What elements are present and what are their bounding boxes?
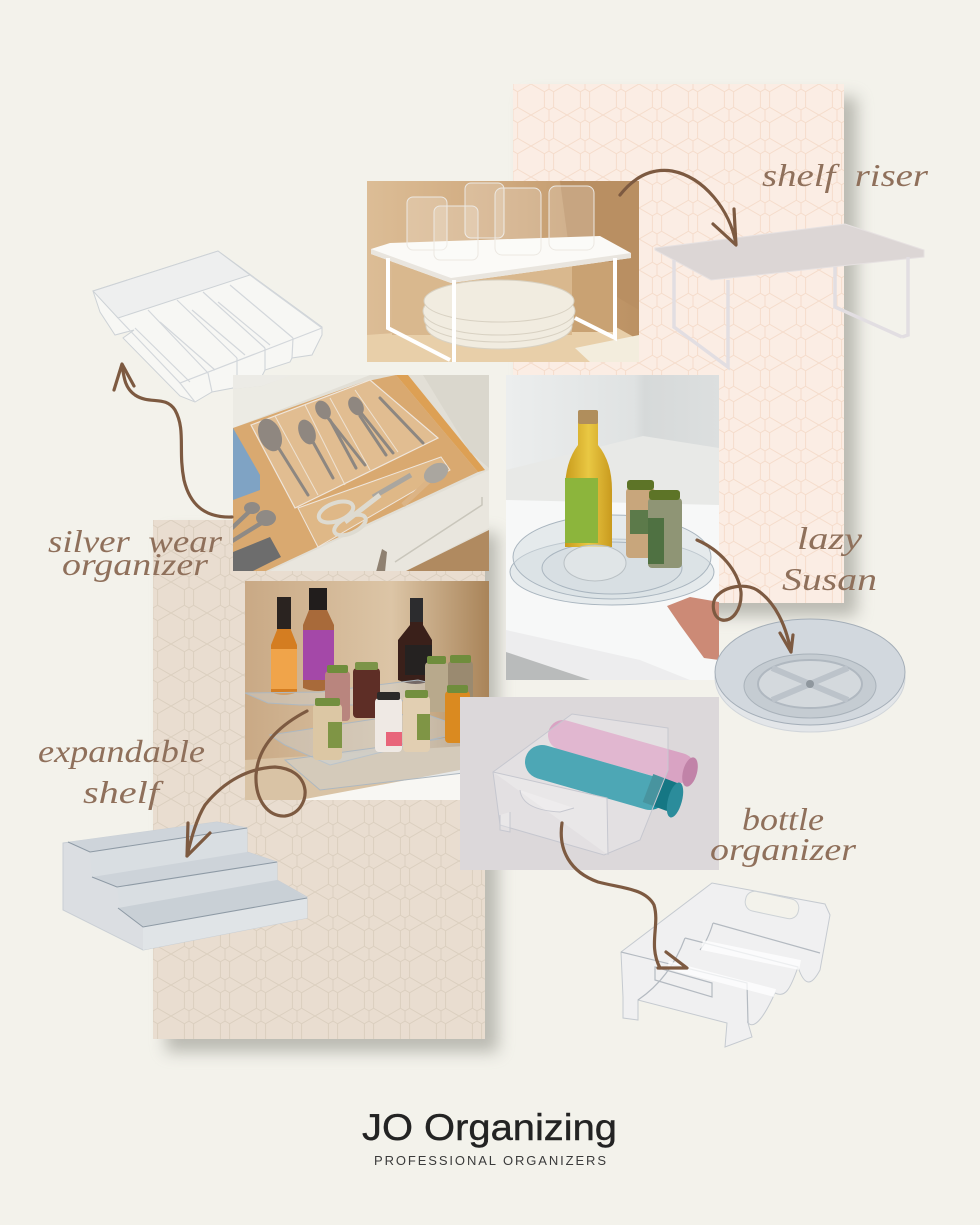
label: expandable shelf bbox=[38, 733, 205, 810]
product: lazy susan turntable bbox=[715, 619, 905, 732]
white riser shelf bbox=[371, 236, 631, 362]
spoons forks knives bbox=[278, 398, 423, 495]
label: silver wear organizer: silver wear bbox=[48, 523, 223, 559]
arrow: shelf photo to riser bbox=[620, 170, 736, 245]
spice jars bbox=[313, 655, 473, 760]
clear step shelves bbox=[245, 680, 460, 790]
label: bottle organizer: organizer bbox=[710, 831, 857, 867]
blue towel bbox=[233, 428, 260, 500]
olive oil bottle bbox=[565, 410, 612, 547]
photo: shelf riser in cupboard bbox=[367, 181, 639, 362]
label: lazy Susan: lazy bbox=[797, 520, 863, 556]
label: lazy Susan: Susan bbox=[782, 561, 877, 597]
glass bowl bbox=[564, 545, 626, 581]
teal bottle bbox=[542, 762, 686, 819]
product: silverware tray bbox=[93, 251, 322, 402]
panel: beige hexagon backdrop bbox=[153, 520, 498, 1052]
photo: lazy susan on counter bbox=[506, 375, 719, 680]
measuring spoons and grater bbox=[233, 502, 281, 571]
label: lazy Susan bbox=[782, 520, 877, 597]
arrow: drawer to silverware tray bbox=[114, 364, 232, 517]
logo: JO Organizing: PROFESSIONAL ORGANIZERS bbox=[374, 1153, 606, 1168]
label: bottle organizer: bottle bbox=[742, 801, 824, 837]
panel: pink hexagon backdrop bbox=[513, 84, 857, 616]
arrow: spice shelf to expandable shelf bbox=[187, 711, 307, 856]
label: expandable shelf: expandable bbox=[38, 733, 205, 769]
label: shelf riser: shelf riser bbox=[762, 157, 929, 193]
logo: JO Organizing: JO Organizing bbox=[362, 1107, 617, 1148]
product: shelf riser bbox=[655, 224, 924, 367]
label: expandable shelf: shelf bbox=[83, 774, 164, 810]
arrow: lazy susan photo to turntable bbox=[697, 540, 793, 652]
product: bottle organizer bbox=[621, 883, 830, 1047]
photo: spice shelf bbox=[245, 581, 489, 800]
photo: bottles in clear rack bbox=[460, 697, 719, 870]
spice jars bbox=[626, 480, 682, 568]
arrow: bottle photo to bottle organizer bbox=[561, 823, 687, 968]
label: silver wear organizer: organizer bbox=[62, 546, 209, 582]
scissors and spatula bbox=[316, 475, 411, 539]
bottles bbox=[271, 588, 432, 695]
pink towel bbox=[667, 597, 719, 660]
label: silver wear organizer bbox=[48, 523, 223, 582]
plate fragment below tray bbox=[233, 375, 292, 389]
drinking glasses bbox=[407, 183, 594, 260]
clear tray bbox=[251, 380, 438, 508]
pink bottle bbox=[563, 735, 701, 788]
photo: cutlery drawer bbox=[233, 375, 489, 572]
logo: JO Organizing bbox=[362, 1107, 617, 1168]
product: expandable shelf bbox=[63, 822, 307, 950]
label: bottle organizer bbox=[710, 801, 857, 867]
turntable bbox=[510, 515, 714, 605]
plates stack bbox=[423, 280, 575, 349]
clear rack bbox=[493, 714, 668, 855]
